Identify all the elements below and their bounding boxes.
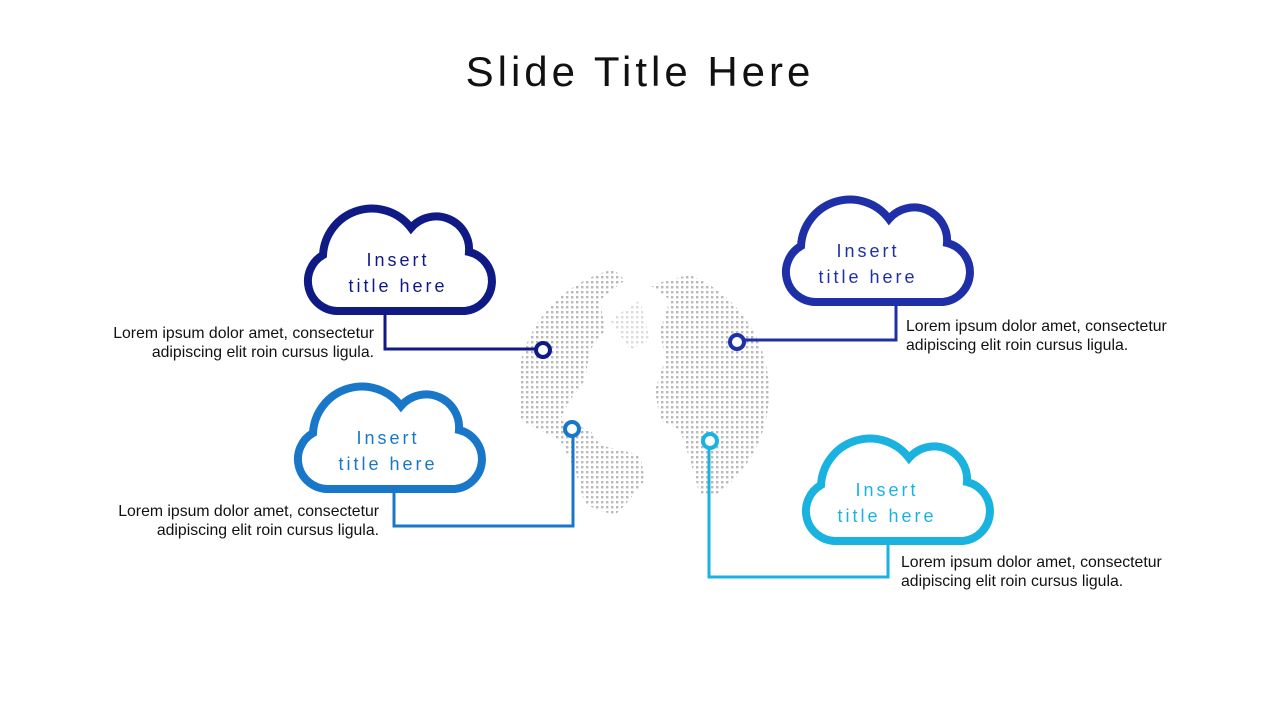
connector: cloud 1 bbox=[385, 312, 550, 357]
cloud 3: Insert bbox=[356, 428, 420, 448]
connector: cloud 2 bbox=[730, 302, 896, 349]
cloud 1: Insert bbox=[366, 250, 430, 270]
cloud 4: title here bbox=[837, 506, 937, 526]
text block 2 bbox=[906, 318, 1167, 354]
cloud 3 bbox=[298, 387, 482, 489]
title: Slide Title Here bbox=[466, 48, 814, 95]
text block 3: Lorem ipsum dolor amet, consectetur bbox=[118, 503, 379, 520]
text block 3 bbox=[118, 503, 379, 539]
cloud 4 bbox=[806, 439, 990, 541]
connector: cloud 3 bbox=[394, 422, 579, 526]
text block 3: adipiscing elit roin cursus ligula. bbox=[157, 522, 379, 539]
cloud 2: title here bbox=[818, 267, 918, 287]
connector: cloud 4 bbox=[703, 434, 888, 577]
text block 1: adipiscing elit roin cursus ligula. bbox=[152, 344, 374, 361]
text block 4 bbox=[901, 554, 1162, 590]
cloud 4: Insert bbox=[855, 480, 919, 500]
text block 1 bbox=[113, 325, 374, 361]
cloud 2 bbox=[786, 200, 970, 302]
cloud 3: title here bbox=[338, 454, 438, 474]
text block 4: adipiscing elit roin cursus ligula. bbox=[901, 573, 1123, 590]
text block 1: Lorem ipsum dolor amet, consectetur bbox=[113, 325, 374, 342]
text block 4: Lorem ipsum dolor amet, consectetur bbox=[901, 554, 1162, 571]
text block 2: Lorem ipsum dolor amet, consectetur bbox=[906, 318, 1167, 335]
cloud 1 bbox=[308, 209, 492, 311]
globe bbox=[520, 266, 770, 520]
cloud 1: title here bbox=[348, 276, 448, 296]
cloud 2: Insert bbox=[836, 241, 900, 261]
text block 2: adipiscing elit roin cursus ligula. bbox=[906, 337, 1128, 354]
